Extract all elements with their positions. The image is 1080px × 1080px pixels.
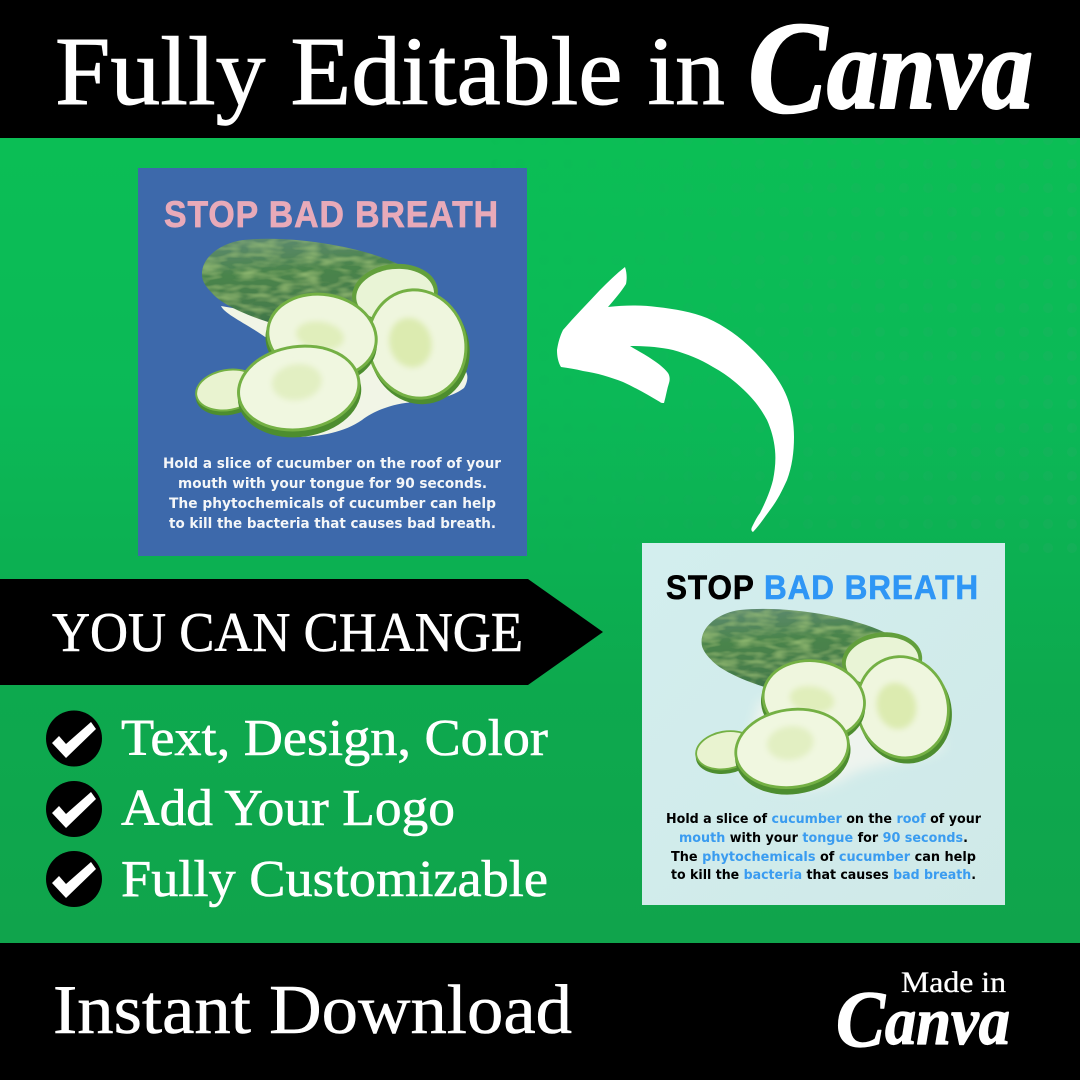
made in: Made in (901, 966, 1006, 999)
green background (0, 138, 1080, 943)
pale panel body text: mouth with your tongue for 90 seconds. (679, 831, 968, 846)
banner arrow: you can change (0, 579, 603, 685)
icon: check 3 (46, 851, 102, 907)
top banner (0, 0, 1080, 138)
cucumber image (192, 239, 482, 445)
bottom banner (0, 943, 1080, 1080)
blue panel body text (163, 456, 501, 532)
title: Fully Editable in (55, 18, 725, 125)
arrow: curved white (557, 267, 794, 532)
canva wordmark, top: anva (827, 6, 1033, 133)
icon: check 2 (46, 781, 102, 837)
blue panel body text: mouth with your tongue for 90 seconds. (178, 476, 487, 492)
white cutout behind cucumber (221, 306, 467, 437)
canva wordmark, bottom: C (836, 976, 887, 1064)
checklist (46, 710, 548, 908)
item: text design color: Text, Design, Color (121, 710, 548, 767)
soft shadow behind cucumber (740, 700, 945, 789)
pale panel heading: STOP BAD BREATH (666, 569, 979, 607)
pale panel body text: The phytochemicals of cucumber can help (671, 850, 976, 865)
panel: blue design (138, 168, 527, 556)
blue panel heading: STOP BAD BREATH (164, 194, 499, 235)
item: add your logo: Add Your Logo (121, 780, 455, 837)
banner text: YOU CAN CHANGE (52, 602, 523, 664)
blue panel body text: to kill the bacteria that causes bad breath. (169, 516, 496, 532)
pale panel body text: Hold a slice of cucumber on the roof of your (666, 812, 982, 827)
item: fully customizable: Fully Customizable (121, 851, 548, 908)
panel: pale design (642, 543, 1005, 905)
canva wordmark, bottom: anva (885, 983, 1010, 1059)
pale panel body text: to kill the bacteria that causes bad breath. (671, 868, 976, 883)
icon: check 1 (46, 710, 102, 766)
pale panel body text (666, 812, 982, 883)
cucumber image (692, 609, 963, 802)
blue panel body text: The phytochemicals of cucumber can help (169, 496, 496, 512)
instant download: Instant Download (53, 972, 572, 1049)
blue panel body text: Hold a slice of cucumber on the roof of your (163, 456, 501, 472)
